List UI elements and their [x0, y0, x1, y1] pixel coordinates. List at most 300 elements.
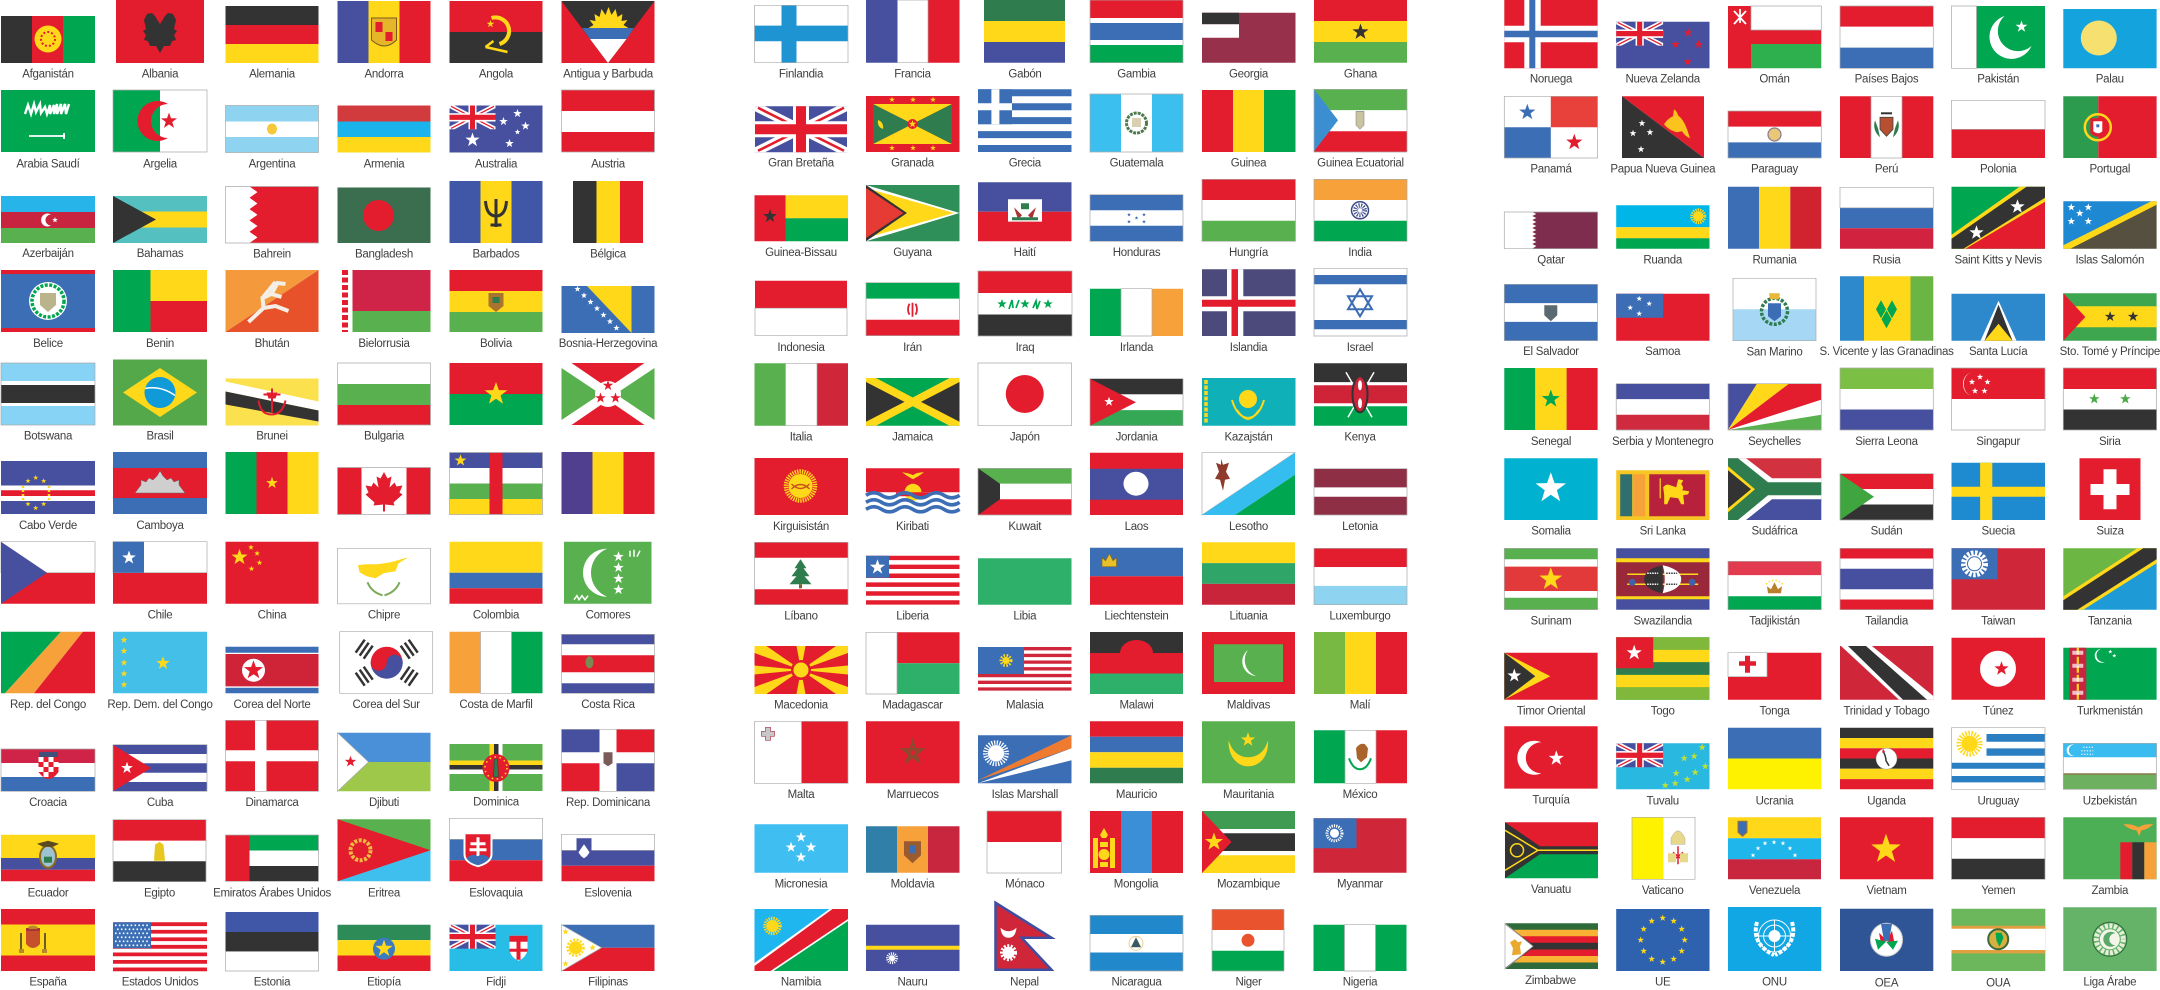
flag: Somalia — [1504, 458, 1598, 538]
flag: Bahamas — [113, 196, 207, 260]
flag: Kuwait — [978, 468, 1072, 533]
flag: Perú — [1840, 96, 1933, 176]
flag: Comores — [564, 542, 652, 622]
flag: Bulgaria: Bulgaria — [364, 430, 405, 442]
flag: Turkmenistán — [2063, 648, 2157, 717]
flag: Surinam: Surinam — [1531, 615, 1571, 627]
flag: Japón: Japón — [1010, 431, 1040, 443]
flag: Lituania — [1202, 542, 1295, 622]
flag: Líbano — [754, 542, 848, 622]
flag: Italia — [754, 363, 848, 443]
flag: San Marino — [1733, 278, 1816, 358]
flag: Corea del Sur — [340, 632, 433, 711]
flag: Nueva Zelanda: Nueva Zelanda — [1626, 74, 1701, 86]
flag: Kiribati — [866, 468, 960, 533]
flag: Antigua y Barbuda: Antigua y Barbuda — [563, 68, 654, 80]
flag: Moldavia: Moldavia — [891, 879, 935, 891]
flag: Sierra Leona: Sierra Leona — [1855, 436, 1919, 448]
flag: Papua Nueva Guinea: Papua Nueva Guinea — [1610, 164, 1716, 176]
flag: Brunei — [226, 378, 318, 443]
flag: China: China — [258, 610, 287, 622]
flag: Paraguay: Paraguay — [1751, 164, 1799, 176]
flag: Botswana: Botswana — [24, 430, 73, 442]
flag: Australia: Australia — [475, 158, 518, 170]
flag: Marruecos — [866, 721, 960, 801]
flag: Nigeria: Nigeria — [1343, 977, 1378, 989]
flag: Finlandia: Finlandia — [779, 68, 824, 80]
flag: Liechtenstein — [1090, 548, 1183, 622]
flag: Mauritania — [1202, 721, 1295, 801]
flag: Eslovenia: Eslovenia — [584, 887, 633, 899]
flag: Guinea: Guinea — [1231, 158, 1267, 170]
flag: Bosnia-Herzegovina — [559, 286, 658, 350]
flag: Yemen: Yemen — [1981, 885, 2015, 897]
flag: Uganda: Uganda — [1867, 795, 1907, 807]
flag: Nauru — [866, 925, 960, 989]
flag: Afganistán: Afganistán — [22, 68, 74, 80]
flag: Colombia — [450, 542, 542, 622]
flag: Sto. Tomé y Príncipe — [2060, 293, 2160, 358]
flag: Madagascar: Madagascar — [882, 700, 943, 712]
flag: Portugal: Portugal — [2090, 164, 2130, 176]
flag: Camerún — [226, 452, 318, 514]
flag: Islas Salomón: Islas Salomón — [2076, 255, 2144, 267]
flag: El Salvador: El Salvador — [1523, 346, 1579, 358]
flag: Bahamas: Bahamas — [137, 248, 184, 260]
flag: Kazajstán — [1202, 378, 1296, 443]
flag: Guinea-Bissau: Guinea-Bissau — [765, 247, 837, 259]
flag: Argentina: Argentina — [249, 158, 296, 170]
flag: Iraq — [978, 271, 1072, 354]
flag: Ruanda: Ruanda — [1643, 255, 1683, 267]
flag: El Salvador — [1504, 284, 1598, 358]
flag: Islas Salomón — [2063, 201, 2157, 267]
flag: Guatemala: Guatemala — [1110, 158, 1164, 170]
flag: Namibia — [754, 909, 848, 989]
flag: Panamá — [1504, 96, 1598, 176]
flag: Níger — [1212, 909, 1284, 989]
flag: Irlanda — [1090, 289, 1183, 354]
flag: Macedonia: Macedonia — [774, 700, 829, 712]
flag: Eslovaquia — [450, 818, 542, 899]
flag: Granada: Granada — [891, 158, 935, 170]
flag: Rep. Dominicana: Rep. Dominicana — [566, 797, 651, 809]
flag: Qatar — [1504, 212, 1598, 267]
flag: Sierra Leona — [1840, 368, 1933, 448]
flag: Noruega: Noruega — [1530, 74, 1573, 86]
flag: Kirguisistán: Kirguisistán — [773, 521, 829, 533]
flag: Cabo Verde: Cabo Verde — [19, 520, 77, 532]
flag: Luxemburgo: Luxemburgo — [1329, 610, 1391, 622]
flag: Zambia: Zambia — [2091, 885, 2129, 897]
flag: Dinamarca: Dinamarca — [245, 797, 299, 809]
flag: Brunei: Brunei — [256, 431, 288, 443]
flag: Estados Unidos: Estados Unidos — [122, 977, 199, 989]
flag: Angola: Angola — [479, 68, 514, 80]
flag: Azerbaiyán — [1, 196, 95, 260]
flag: Bahrein: Bahrein — [253, 248, 291, 260]
flag: Etiopía: Etiopía — [367, 977, 402, 989]
flag: Rep. Dem. del Congo — [107, 632, 213, 711]
flag: Vaticano — [1632, 817, 1695, 897]
flag: Ruanda — [1616, 205, 1710, 267]
flag: Francia: Francia — [894, 68, 932, 80]
flag: Gran Bretaña — [755, 106, 847, 170]
flag: Serbia y Montenegro: Serbia y Montenegro — [1612, 436, 1713, 448]
flag: Micronesia: Micronesia — [775, 879, 828, 891]
flag: Japón — [978, 363, 1072, 443]
flag: Turquía — [1504, 726, 1598, 807]
flag: Alemania — [226, 6, 318, 80]
flag: Francia — [866, 0, 960, 80]
flag: Andorra — [338, 1, 430, 80]
flag: Estonia: Estonia — [254, 977, 291, 989]
flag: Samoa — [1616, 294, 1710, 358]
flag: Gabón — [984, 0, 1065, 80]
flag: ONU: ONU — [1762, 977, 1787, 989]
flag: Vietnam — [1840, 817, 1933, 897]
flag: Laos: Laos — [1125, 521, 1149, 533]
flag: Granada — [866, 96, 960, 170]
flag: Polonia: Polonia — [1980, 164, 2017, 176]
flag: Malasia: Malasia — [1006, 700, 1045, 712]
flag: Ghana — [1314, 0, 1407, 80]
flag: Tanzania — [2063, 548, 2157, 627]
flag: Jamaica — [866, 378, 960, 443]
flag: Etiopía — [338, 925, 430, 989]
flag: Islas Marshall — [978, 735, 1072, 801]
flag: Bolivia — [450, 270, 542, 350]
flag: Djibuti — [338, 733, 430, 809]
flag: ONU — [1728, 907, 1821, 989]
flag: Moldavia — [866, 826, 960, 891]
flag: Guinea Ecuatorial: Guinea Ecuatorial — [1317, 158, 1404, 170]
flag: Bhután: Bhután — [255, 338, 289, 350]
flag: Mauricio: Mauricio — [1116, 789, 1157, 801]
flag: Siria — [2063, 368, 2157, 448]
flag: Singapur — [1952, 368, 2045, 448]
flag: Nigeria — [1314, 925, 1406, 989]
flag: Guinea-Bissau — [754, 195, 848, 259]
flag: Kiribati: Kiribati — [896, 521, 929, 533]
flag: Jordania — [1090, 379, 1183, 443]
flag: Cuba — [113, 745, 207, 809]
flag: Georgia: Georgia — [1229, 68, 1269, 80]
flag: Indonesia: Indonesia — [777, 342, 826, 354]
flag: México: México — [1343, 789, 1377, 801]
flag: Gambia — [1090, 0, 1183, 80]
flag: Tuvalu — [1616, 743, 1710, 807]
flag: Somalia: Somalia — [1531, 526, 1572, 538]
flag: Rumania — [1728, 187, 1821, 267]
flag: India — [1314, 179, 1407, 259]
flag: Uruguay: Uruguay — [1977, 795, 2019, 807]
flag: Saint Kitts y Nevis — [1952, 187, 2045, 267]
flag: Costa de Marfil — [450, 632, 542, 711]
flag: Bosnia-Herzegovina: Bosnia-Herzegovina — [559, 338, 658, 350]
flag: Suecia: Suecia — [1981, 526, 2016, 538]
flag: Tanzania: Tanzania — [2088, 615, 2133, 627]
flag: Ecuador — [1, 835, 95, 899]
flag: Malawi — [1090, 632, 1183, 712]
flag: Gambia: Gambia — [1117, 68, 1157, 80]
flag: Guyana: Guyana — [893, 247, 933, 259]
flag: Omán — [1728, 6, 1821, 86]
flag: Santa Lucía: Santa Lucía — [1969, 346, 2028, 358]
flag: S. Vicente y las Granadinas — [1819, 276, 1954, 358]
flag: Italia: Italia — [790, 431, 813, 443]
flag: Rep. del Congo: Rep. del Congo — [10, 699, 86, 711]
flag: Zimbabwe: Zimbabwe — [1525, 975, 1576, 987]
flag: Santa Lucía — [1952, 294, 2045, 358]
flag: Sto. Tomé y Príncipe: Sto. Tomé y Príncipe — [2060, 346, 2160, 358]
flag: Irán: Irán — [903, 342, 922, 354]
flag: Marruecos: Marruecos — [887, 789, 939, 801]
flag: Surinam — [1504, 548, 1598, 627]
flag: Ghana: Ghana — [1344, 68, 1378, 80]
flag: Corea del Norte: Corea del Norte — [234, 699, 310, 711]
flag: Qatar: Qatar — [1537, 255, 1565, 267]
flag: Malí — [1314, 632, 1407, 712]
flag: Túnez: Túnez — [1983, 705, 2014, 717]
flag: Uzbekistán: Uzbekistán — [2083, 795, 2137, 807]
flag: Jamaica: Jamaica — [892, 431, 934, 443]
flag: Irlanda: Irlanda — [1120, 342, 1154, 354]
flag: Austria: Austria — [591, 158, 626, 170]
flag: Tailandia: Tailandia — [1865, 615, 1909, 627]
flag: Yemen — [1952, 817, 2045, 897]
flag: Venezuela — [1728, 817, 1821, 897]
flag: Botswana — [1, 363, 95, 442]
flag: España: España — [29, 977, 68, 989]
flag: Islas Marshall: Islas Marshall — [992, 789, 1058, 801]
flag: Kenya — [1314, 363, 1407, 443]
flag: Australia — [450, 106, 542, 170]
flag: Polonia — [1952, 100, 2045, 176]
flag: Líbano: Líbano — [784, 610, 818, 622]
flag: Zimbabwe — [1505, 923, 1598, 987]
flag: Chipre: Chipre — [368, 610, 400, 622]
flag: Senegal — [1504, 368, 1598, 448]
flag: Swazilandia: Swazilandia — [1634, 615, 1693, 627]
flag: San Marino: San Marino — [1746, 346, 1803, 358]
flag: Emiratos Árabes Unidos: Emiratos Árabes Unidos — [213, 886, 331, 899]
flag: Mongolia: Mongolia — [1114, 879, 1159, 891]
flag: Rep. Dominicana — [562, 729, 654, 809]
flag: Myanmar — [1314, 818, 1406, 890]
flag: Madagascar — [866, 632, 960, 712]
flag: Bangladesh: Bangladesh — [355, 248, 413, 260]
flag: Países Bajos: Países Bajos — [1855, 74, 1919, 86]
flag: Laos — [1090, 453, 1183, 533]
flag: Egipto: Egipto — [144, 887, 175, 899]
flag: India: India — [1348, 247, 1373, 259]
flag: Malí: Malí — [1350, 700, 1371, 712]
flag: Papua Nueva Guinea — [1610, 96, 1716, 176]
flag: Países Bajos — [1840, 6, 1933, 86]
flag: Benin: Benin — [146, 338, 174, 350]
flag: Letonia — [1314, 469, 1407, 533]
flag: Malawi: Malawi — [1119, 700, 1154, 712]
flag: Saint Kitts y Nevis: Saint Kitts y Nevis — [1955, 255, 2042, 267]
flag: Eritrea: Eritrea — [368, 887, 401, 899]
flag: Brasil — [113, 360, 207, 442]
flag: Argelia: Argelia — [143, 158, 178, 170]
flag: Croacia: Croacia — [29, 797, 68, 809]
flag: Bulgaria — [338, 363, 430, 442]
flag: Pakistán: Pakistán — [1977, 74, 2019, 86]
flag: Liga Árabe — [2063, 907, 2157, 989]
flag: Armenia: Armenia — [364, 158, 405, 170]
flag: Sri Lanka — [1616, 470, 1710, 538]
flag: Mónaco: Mónaco — [1005, 879, 1044, 891]
flag: Taiwan: Taiwan — [1981, 615, 2015, 627]
flag: Singapur: Singapur — [1976, 436, 2021, 448]
flag: Armenia — [338, 106, 430, 170]
flag: Nepal: Nepal — [1010, 977, 1039, 989]
flag: Mauritania: Mauritania — [1223, 789, 1275, 801]
flag: Islandia: Islandia — [1230, 342, 1268, 354]
flag: Sudáfrica — [1728, 458, 1821, 538]
flag: Canadá — [338, 468, 430, 514]
flag: Finlandia — [754, 5, 848, 80]
flag: Comores: Comores — [586, 610, 631, 622]
flag: Rep. del Congo — [1, 632, 95, 711]
flag: Perú: Perú — [1875, 164, 1898, 176]
flag: República Checa — [1, 542, 95, 604]
flag: Maldivas: Maldivas — [1227, 700, 1271, 712]
flag: OEA — [1840, 909, 1933, 990]
flag: Egipto — [113, 820, 206, 899]
flag: Liechtenstein: Liechtenstein — [1104, 610, 1169, 622]
flag: Belice: Belice — [33, 338, 63, 350]
flag: Grecia: Grecia — [1009, 158, 1042, 170]
flag: Guinea — [1202, 90, 1296, 170]
flag: Argelia — [113, 90, 207, 170]
flag: Seychelles — [1728, 384, 1821, 448]
flag: Bolivia: Bolivia — [480, 338, 513, 350]
flag: Israel: Israel — [1347, 342, 1373, 354]
flag: Sri Lanka: Sri Lanka — [1640, 526, 1687, 538]
flag: China — [226, 542, 318, 622]
flag: Portugal — [2063, 96, 2157, 176]
flag: Angola — [450, 1, 542, 80]
flag: Mauricio — [1090, 721, 1183, 801]
flag: Tadjikistán — [1728, 561, 1821, 627]
flag: Bélgica: Bélgica — [590, 248, 627, 260]
flag: Uruguay — [1952, 728, 2045, 807]
flag: Azerbaiyán: Azerbaiján — [22, 248, 74, 260]
flag: Costa Rica — [562, 634, 654, 711]
flag: Zambia — [2063, 817, 2157, 897]
flag: Tonga — [1728, 653, 1821, 717]
flag: Mónaco — [987, 811, 1062, 891]
flag: Suecia — [1952, 463, 2045, 538]
flag: Ecuador: Ecuador — [28, 887, 69, 899]
flag: Bielorrusia — [338, 270, 430, 350]
flag: Timor Oriental: Timor Oriental — [1517, 705, 1585, 717]
flag: Vietnam: Vietnam — [1866, 885, 1907, 897]
flag: Guyana — [866, 185, 960, 259]
flag: Swazilandia — [1616, 548, 1710, 627]
flag: Djibuti: Djibuti — [369, 797, 399, 809]
flag: Liberia — [866, 556, 960, 622]
flag: Liga Árabe: Liga Árabe — [2083, 976, 2136, 989]
flag: Malta — [754, 721, 848, 801]
flag: Vaticano: Vaticano — [1642, 885, 1684, 897]
flag: Islandia — [1202, 269, 1296, 354]
flag: Filipinas — [562, 925, 654, 989]
flag: Suiza: Suiza — [2096, 526, 2125, 538]
flag: Eritrea — [338, 819, 430, 899]
flag: Rusia — [1840, 187, 1933, 267]
flag: Arabia Saudí — [1, 90, 95, 170]
flag: Taiwan — [1952, 548, 2045, 627]
flag: Noruega — [1504, 0, 1598, 86]
flag: Sudán — [1840, 474, 1933, 538]
flag: Andorra: Andorra — [365, 68, 404, 80]
flag: Serbia y Montenegro — [1612, 384, 1713, 448]
flag: Gabón: Gabón — [1008, 68, 1042, 80]
flag: Jordania: Jordania — [1116, 431, 1158, 443]
flag: Letonia: Letonia — [1342, 521, 1379, 533]
flag: Liberia: Liberia — [896, 610, 930, 622]
flag: Seychelles: Seychelles — [1748, 436, 1801, 448]
flag: Rep. Dem. del Congo: Rep. Dem. del Congo — [107, 699, 213, 711]
flag: Turkmenistán: Turkmenistán — [2077, 705, 2143, 717]
flag: Eslovaquia: Eslovaquia — [469, 887, 524, 899]
flag: S. Vicente y las Granadinas: S. Vicente y las Granadinas — [1819, 346, 1954, 358]
flag: Chipre — [338, 548, 430, 622]
flag: Malasia — [978, 647, 1072, 712]
flag: Fidji — [450, 925, 542, 989]
flag: Haití: Haití — [1014, 247, 1037, 259]
flag: Barbados: Barbados — [472, 248, 520, 260]
flag: Corea del Norte — [226, 647, 318, 711]
flag: Rumania: Rumania — [1752, 255, 1797, 267]
flag: Kuwait: Kuwait — [1008, 521, 1042, 533]
flag: Dominica — [450, 744, 542, 809]
flag: Paraguay — [1728, 111, 1821, 176]
flag: Venezuela: Venezuela — [1749, 885, 1801, 897]
flag: Lituania: Lituania — [1229, 610, 1268, 622]
flag: Ucrania — [1728, 728, 1821, 807]
flag: OUA: OUA — [1986, 978, 2011, 990]
flag: Timor Oriental — [1504, 653, 1598, 717]
flag: Croacia — [1, 749, 95, 809]
flag: Trinidad y Tobago — [1840, 646, 1933, 717]
flag: Alemania: Alemania — [249, 68, 296, 80]
flag: Camboya: Camboya — [136, 520, 185, 532]
flag: Pakistán — [1952, 6, 2045, 86]
flag: Siria: Siria — [2099, 436, 2121, 448]
flag: Macedonia — [754, 646, 848, 712]
flag: Burkina Faso — [450, 363, 542, 425]
flag: Uzbekistán — [2063, 743, 2157, 807]
flag: Belice — [1, 270, 95, 350]
flag: UE — [1616, 909, 1710, 989]
flag: Mozambique — [1202, 811, 1295, 891]
flag: Albania: Albania — [142, 68, 179, 80]
flag: Emiratos Árabes Unidos — [213, 835, 331, 899]
flag: Indonesia — [755, 281, 847, 354]
flag: Honduras: Honduras — [1113, 247, 1161, 259]
flag: Sudán: Sudán — [1871, 526, 1902, 538]
flag: Palau — [2063, 9, 2157, 86]
flag: Haití — [978, 182, 1072, 259]
flag: Lesotho — [1202, 453, 1295, 533]
flag: Trinidad y Tobago: Trinidad y Tobago — [1843, 705, 1930, 717]
